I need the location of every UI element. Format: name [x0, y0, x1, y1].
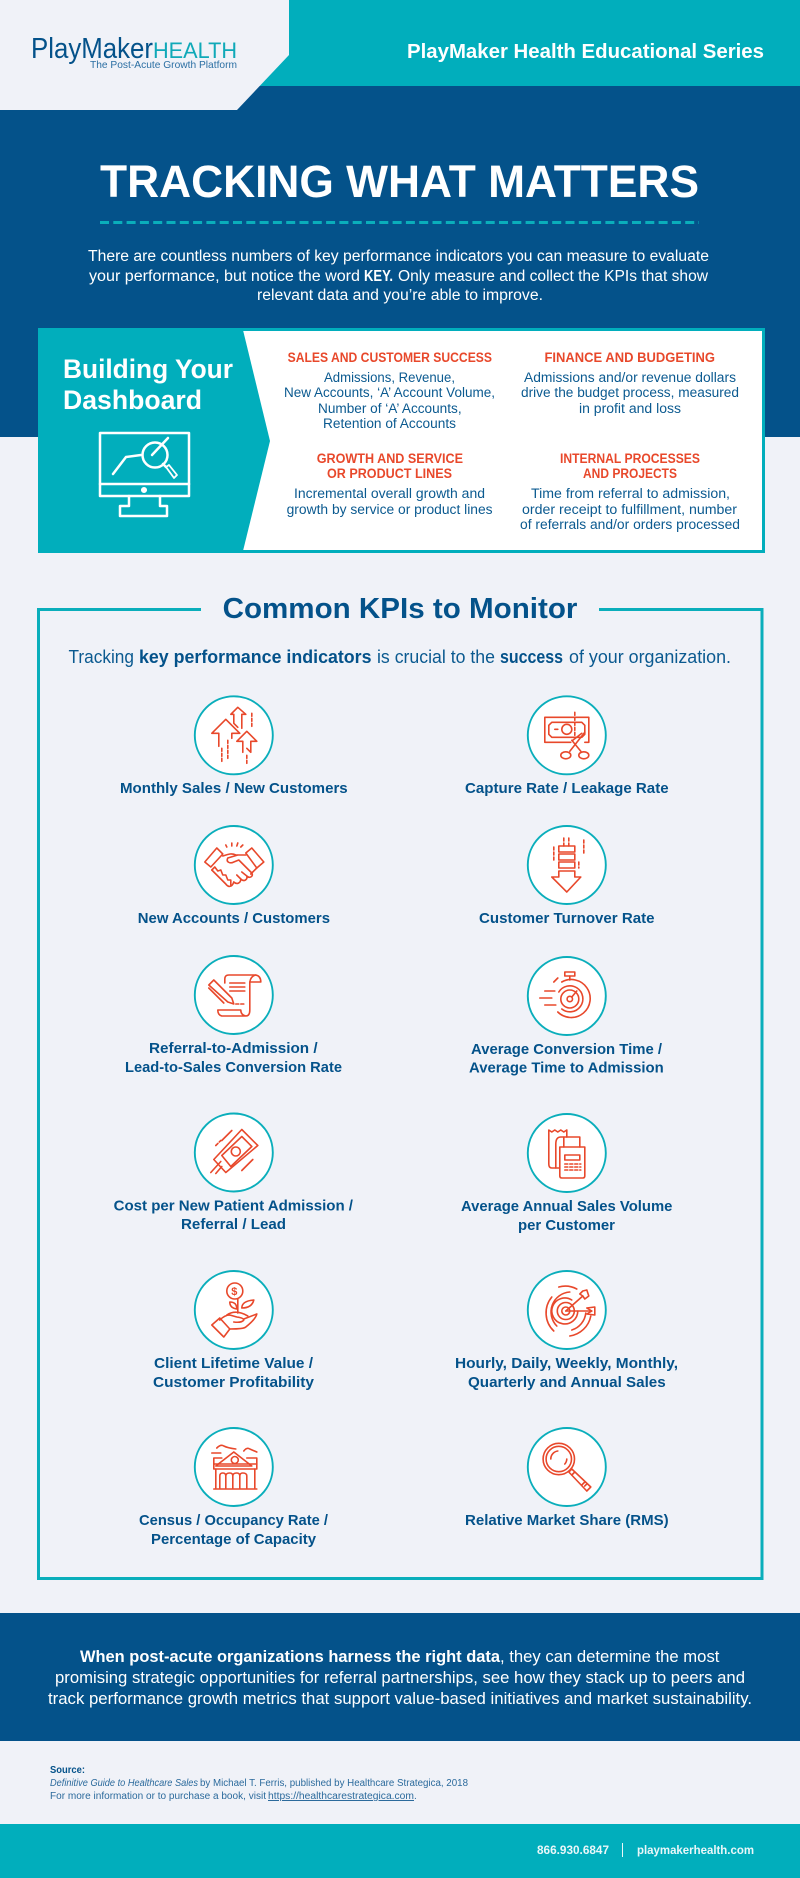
label: Client Lifetime Value /	[154, 1355, 314, 1372]
header band	[0, 0, 800, 437]
KPI intro sentence	[68, 647, 731, 667]
internal processes and projects	[520, 451, 740, 532]
panel: building your dashboard	[38, 328, 764, 553]
label: Referral / Lead	[181, 1216, 286, 1233]
label: Lead-to-Sales Conversion Rate	[125, 1059, 342, 1076]
growth and service or product lines: OR PRODUCT LINES	[327, 466, 452, 481]
finance and budgeting	[521, 350, 739, 416]
dashboard arrow block	[38, 328, 270, 553]
contact details	[537, 1843, 754, 1857]
KPI: average conversion time	[469, 957, 664, 1076]
label: Monthly Sales / New Customers	[120, 780, 348, 797]
label: Hourly, Daily, Weekly, Monthly,	[455, 1355, 678, 1372]
label: Average Annual Sales Volume	[461, 1198, 672, 1215]
footer band	[0, 1824, 800, 1878]
internal processes and projects: of referrals and/or orders processed	[520, 517, 740, 532]
growth and service or product lines: GROWTH AND SERVICE	[317, 451, 463, 466]
icon: target with darts	[546, 1286, 595, 1336]
intro text: relevant data and you’re able to improve.	[257, 287, 543, 304]
icon: down arrow stack	[552, 838, 584, 892]
source note: Source:	[50, 1765, 85, 1776]
icon: flying banknote	[211, 1130, 258, 1174]
icon: payment terminal	[549, 1130, 585, 1178]
KPI intro sentence: key performance indicators	[139, 647, 372, 667]
icon: monitor with magnifier	[100, 433, 189, 516]
source note: Definitive Guide to Healthcare Sales	[50, 1778, 198, 1789]
KPI: capture rate	[465, 696, 669, 797]
dashboard heading	[63, 354, 233, 415]
intro text: KEY.	[364, 268, 393, 285]
icon: money and scissors	[545, 712, 589, 759]
label: Percentage of Capacity	[151, 1531, 317, 1548]
sales and customer success	[284, 350, 495, 431]
internal processes and projects: order receipt to fulfillment, number	[522, 502, 738, 517]
label	[125, 1040, 342, 1076]
icon: stopwatch	[540, 972, 590, 1018]
KPI: relative market share	[465, 1428, 669, 1529]
source note: by Michael T. Ferris, published by Healthcare Strategica, 2018	[200, 1778, 468, 1789]
title dashed rule	[100, 221, 699, 224]
sales and customer success: Number of ‘A’ Accounts,	[318, 401, 462, 416]
KPI: referral to admission	[125, 956, 342, 1076]
label	[461, 1198, 672, 1234]
KPI: census occupancy	[139, 1428, 329, 1548]
logo: HEALTH	[153, 38, 237, 63]
finance and budgeting: FINANCE AND BUDGETING	[544, 350, 715, 365]
internal processes and projects: INTERNAL PROCESSES	[560, 451, 700, 466]
KPI intro sentence: of your organization.	[569, 647, 731, 667]
icon: magnifying glass	[543, 1443, 591, 1491]
KPI: hourly daily weekly sales	[455, 1271, 678, 1391]
label	[153, 1355, 315, 1391]
source note	[50, 1765, 468, 1802]
logo: The Post-Acute Growth Platform	[90, 59, 237, 71]
icon: pen and scroll	[209, 975, 261, 1016]
label: New Accounts / Customers	[138, 910, 330, 927]
closing text: When post-acute organizations harness the right data	[80, 1647, 501, 1666]
label: Average Conversion Time /	[471, 1041, 663, 1058]
KPI intro sentence: is crucial to the	[377, 647, 495, 667]
label: Average Time to Admission	[469, 1060, 664, 1076]
label: per Customer	[518, 1217, 615, 1234]
KPI: client lifetime value	[153, 1271, 315, 1391]
finance and budgeting: drive the budget process, measured	[521, 385, 739, 400]
intro text	[88, 248, 709, 304]
main title: TRACKING WHAT MATTERS	[100, 156, 699, 207]
icon: handshake	[205, 843, 264, 886]
closing text: track performance growth metrics that support value-based initiatives and market sustainability.	[48, 1689, 752, 1708]
icon: hand with money plant	[212, 1283, 257, 1337]
KPI: cost per new patient	[114, 1114, 354, 1233]
finance and budgeting: Admissions and/or revenue dollars	[524, 370, 736, 385]
source note: https://healthcarestrategica.com	[268, 1791, 414, 1802]
dashboard heading: Building Your	[63, 354, 233, 384]
icon: arrows up	[212, 707, 257, 763]
closing text: , they can determine the most	[500, 1647, 720, 1666]
dashboard heading: Dashboard	[63, 385, 202, 415]
label	[469, 1041, 664, 1076]
series title: PlayMaker Health Educational Series	[407, 41, 764, 63]
KPI intro sentence: Tracking	[68, 647, 134, 667]
label: Cost per New Patient Admission /	[114, 1198, 354, 1215]
source note: For more information or to purchase a book, visit	[50, 1791, 266, 1802]
KPI intro sentence: success	[500, 647, 563, 667]
icon: building	[212, 1445, 257, 1489]
KPI: monthly sales	[120, 696, 348, 797]
label: Customer Profitability	[153, 1374, 315, 1391]
growth and service or product lines: growth by service or product lines	[287, 502, 493, 517]
label: Census / Occupancy Rate /	[139, 1512, 329, 1529]
intro text: There are countless numbers of key performance indicators you can measure to evaluate	[88, 248, 709, 265]
label: Customer Turnover Rate	[479, 910, 654, 927]
contact details: 866.930.6847	[537, 1843, 609, 1857]
panel: common KPIs frame	[38, 610, 762, 1578]
label	[455, 1355, 678, 1391]
logo	[31, 33, 237, 71]
label	[139, 1512, 329, 1548]
panel: closing statement	[0, 1613, 800, 1741]
KPI: average annual sales volume	[461, 1114, 672, 1234]
sales and customer success: SALES AND CUSTOMER SUCCESS	[288, 350, 492, 365]
sales and customer success: Admissions, Revenue,	[324, 370, 455, 385]
logo: PlayMaker	[31, 33, 153, 65]
growth and service or product lines	[287, 451, 493, 517]
intro text: Only measure and collect the KPIs that show	[398, 268, 709, 285]
sales and customer success: New Accounts, ‘A’ Account Volume,	[284, 385, 495, 400]
source note: .	[414, 1791, 417, 1802]
contact details: playmakerhealth.com	[637, 1843, 754, 1857]
label: Capture Rate / Leakage Rate	[465, 780, 669, 797]
KPI: customer turnover	[479, 826, 654, 927]
internal processes and projects: Time from referral to admission,	[531, 486, 730, 501]
label: Quarterly and Annual Sales	[468, 1374, 666, 1391]
closing text	[48, 1647, 752, 1708]
label: Relative Market Share (RMS)	[465, 1512, 669, 1529]
intro text: your performance, but notice the word	[89, 268, 360, 285]
finance and budgeting: in profit and loss	[579, 401, 681, 416]
growth and service or product lines: Incremental overall growth and	[294, 486, 485, 501]
icon: hand with money plant: $	[231, 1286, 237, 1298]
sales and customer success: Retention of Accounts	[323, 416, 456, 431]
label	[114, 1198, 354, 1233]
label: Referral-to-Admission /	[149, 1040, 318, 1057]
KPI heading: Common KPIs to Monitor	[223, 593, 577, 625]
closing text: promising strategic opportunities for referral partnerships, see how they stack up to peers and	[55, 1668, 745, 1687]
internal processes and projects: AND PROJECTS	[583, 466, 677, 481]
KPI: new accounts	[138, 826, 330, 927]
